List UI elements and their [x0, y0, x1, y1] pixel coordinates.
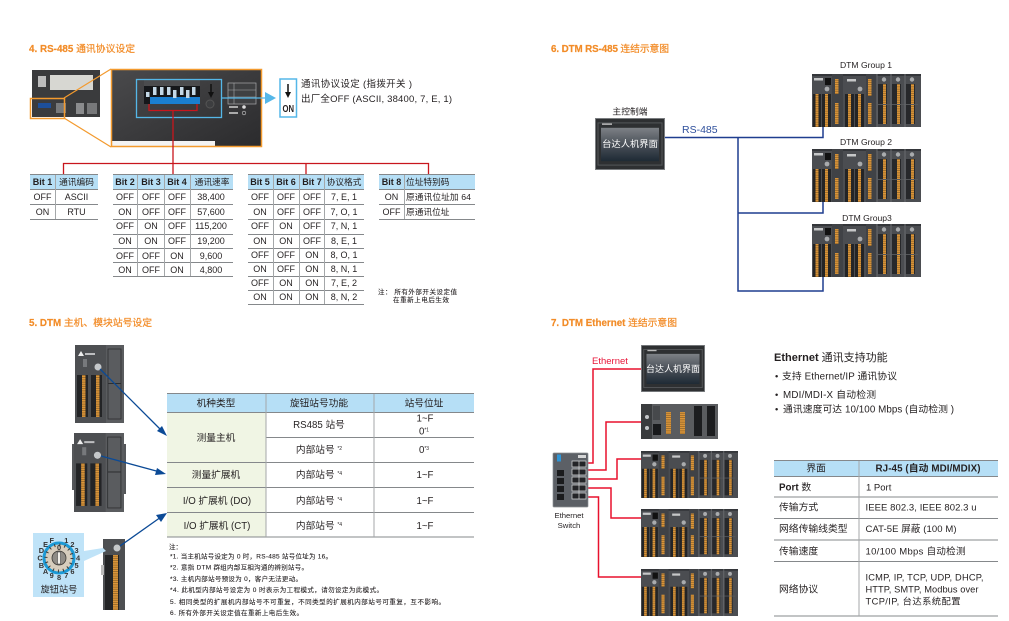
table: Bit 2-4 baud rate: 57,600 [197, 207, 225, 217]
table: Bit 1: RTU [67, 207, 86, 217]
table: Bit 5-7 protocol format: Bit 6 [276, 177, 296, 187]
table: Bit 5-7 protocol format: Bit 5 [250, 177, 270, 187]
notes: station number footnotes: *2. 意指 DTM 群组内部互相沟通的辨别站号。 [170, 562, 308, 572]
table: station number [167, 394, 474, 537]
table: Bit 2-4 baud rate: Bit 3 [141, 177, 161, 187]
table: Bit 5-7 protocol format: OFF [277, 250, 295, 260]
arrows: knobs to table [100, 369, 167, 546]
device: HMI master: 台达人机界面 [602, 138, 658, 149]
group: DTM Group 2 [812, 137, 921, 202]
table: Ethernet specifications: 传输速度 [779, 544, 818, 558]
notes: station number footnotes: 5. 相同类型的扩展机内部站号不可重复，不同类型的扩展机内部站号可重复，互不影响。 [170, 597, 445, 606]
table: Bit 5-7 protocol format: 7, O, 1 [330, 207, 358, 217]
table: station number: 测量扩展机 [192, 468, 241, 481]
table: Bit 5-7 protocol format: 7, E, 1 [331, 192, 357, 202]
table: Bit 2-4 baud rate: OFF [142, 207, 160, 217]
note: external switch settings [378, 287, 458, 304]
device: DTM group row 2 [641, 509, 738, 557]
text: Ethernet support features: 通讯速度可达 10/100 Mbps (自动检测 ) [783, 402, 954, 416]
group: DTM Group 3: DTM Group3 [842, 213, 892, 223]
callout: rotary knob station number [33, 533, 106, 597]
table: Bit 5-7 protocol format: Bit 7 [302, 177, 322, 187]
table: Bit 2-4 baud rate: ON [118, 207, 132, 217]
table: station number: 1~F [417, 521, 434, 532]
callout: rotary knob station number: D [39, 546, 45, 555]
callout: rotary knob station number: 1 [64, 536, 68, 545]
label: RS-485: RS-485 [682, 124, 718, 136]
table: Bit 2-4 baud rate: ON [170, 265, 184, 275]
text: factory default description: 通讯协议设定 (指拨开关 ) [301, 78, 412, 90]
table: station number: *4 [337, 522, 342, 528]
icon: ON switch direction [280, 79, 296, 117]
photo: DIP switch detail [111, 69, 262, 147]
table: station number: RS485 站号 [293, 418, 345, 431]
table: Bit 2-4 baud rate: OFF [168, 207, 186, 217]
table: Bit 5-7 protocol format: 8, E, 1 [331, 236, 357, 246]
text: Ethernet support features: • [775, 390, 778, 400]
table: station number: *1 [424, 428, 429, 434]
panel: section 5 station number settings [29, 316, 474, 617]
table: Bit 2-4 baud rate: OFF [168, 236, 186, 246]
label: Ethernet: Ethernet [592, 356, 628, 367]
table: Ethernet specifications: 界面 [806, 462, 826, 474]
table: Bit 5-7 protocol format [248, 174, 364, 304]
table: Bit 5-7 protocol format: OFF [277, 264, 295, 274]
panel: section 6 RS-485 connection diagram [551, 42, 921, 291]
table: station number: 1~F [417, 470, 434, 481]
table: Bit 1: 通讯编码 [59, 176, 94, 187]
callout: rotary knob station number: E [43, 540, 48, 549]
text: Ethernet support features: 支持 Ethernet/IP 通讯协议 [782, 370, 897, 382]
callout: rotary knob station number: 5 [75, 561, 79, 570]
heading: section 6: 6. DTM RS-485 连结示意图 [551, 42, 669, 55]
table: station number: I/O 扩展机 (CT) [184, 519, 250, 532]
panel: section 7 Ethernet connection diagram [551, 316, 998, 616]
table: Ethernet specifications [774, 460, 998, 616]
table: Bit 5-7 protocol format: ON [279, 278, 293, 288]
device: HMI [641, 345, 705, 392]
table: Bit 8 address code: 原通讯位址 [406, 206, 450, 217]
table: Bit 5-7 protocol format: OFF [303, 192, 321, 202]
table: Ethernet specifications: CAT-5E 屏蔽 (100 M) [866, 523, 956, 535]
group: DTM Group 1 [812, 60, 921, 127]
table: Ethernet specifications: 网络协议 [779, 582, 818, 596]
table: station number: *4 [337, 497, 342, 503]
table: Bit 2-4 baud rate: 9,600 [200, 251, 222, 261]
callout: rotary knob station number: 8 [57, 573, 61, 582]
text: factory default description [301, 78, 452, 105]
table: Bit 5-7 protocol format: ON [305, 264, 319, 274]
photo: DTM device thumbnail [30, 70, 100, 118]
table: Ethernet specifications: 网络传输线类型 [779, 522, 848, 535]
table: Bit 2-4 baud rate: OFF [168, 192, 186, 202]
table: Bit 5-7 protocol format: OFF [303, 207, 321, 217]
arrow: DIP switch to ON indicator [221, 92, 276, 104]
table: Bit 2-4 baud rate: 115,200 [195, 221, 227, 231]
photo: IO module [101, 539, 125, 610]
table: Bit 2-4 baud rate: ON [144, 236, 158, 246]
table: station number: 测量主机 [197, 431, 236, 444]
table: station number: *3 [424, 446, 429, 452]
table: Bit 8 address code [379, 174, 475, 220]
table: Ethernet specifications: Port 数 [779, 480, 811, 494]
table: Bit 2-4 baud rate: ON [118, 236, 132, 246]
table: Bit 2-4 baud rate: ON [118, 265, 132, 275]
table: Bit 5-7 protocol format: OFF [277, 192, 295, 202]
table: Bit 5-7 protocol format: 7, E, 2 [331, 278, 357, 288]
callout: rotary knob station number: 6 [70, 567, 74, 576]
table: Bit 5-7 protocol format: OFF [251, 278, 269, 288]
group: DTM Group 1: DTM Group 1 [840, 60, 892, 70]
label: Ethernet Switch [554, 511, 584, 530]
table: Bit 5-7 protocol format: ON [305, 278, 319, 288]
table: station number: 1~F [417, 414, 434, 424]
table: Bit 5-7 protocol format: ON [253, 207, 267, 217]
table: Bit 5-7 protocol format: OFF [251, 221, 269, 231]
callout: rotary knob station number: 旋钮站号 [41, 584, 77, 594]
table: Bit 2-4 baud rate: OFF [168, 221, 186, 231]
table: Bit 8 address code: ON [385, 192, 398, 202]
table: station number: 内部站号 [296, 496, 335, 507]
table: Bit 5-7 protocol format: ON [253, 264, 267, 274]
table: Bit 1: ASCII [65, 192, 88, 202]
table: Bit 5-7 protocol format: ON [253, 236, 267, 246]
table: Bit 2-4 baud rate: ON [170, 251, 184, 261]
table: Bit 5-7 protocol format: ON [279, 221, 293, 231]
table: Bit 5-7 protocol format: OFF [303, 221, 321, 231]
notes: station number footnotes: *3. 主机内部站号预设为 0，客户无法更动。 [170, 574, 302, 583]
table: Bit 2-4 baud rate: ON [144, 221, 158, 231]
device: Ethernet switch [553, 453, 588, 507]
table: Bit 5-7 protocol format: 7, N, 1 [331, 221, 357, 231]
table: station number: 内部站号 [296, 470, 335, 481]
table: station number: 1~F [417, 496, 434, 507]
table: Bit 5-7 protocol format: ON [253, 292, 267, 302]
table: Bit 8 address code: OFF [382, 207, 401, 217]
device: HMI master [595, 118, 665, 170]
panel: section 4 RS-485 communication settings [29, 42, 475, 304]
notes: station number footnotes: 6. 所有外部开关设定值在重新上电后生效。 [170, 608, 303, 617]
heading: section 5: 5. DTM 主机、模块站号设定 [29, 316, 152, 329]
callout: rotary knob station number: F [49, 536, 54, 545]
connector: red bracket to tables [64, 104, 428, 174]
table: Ethernet specifications: ICMP, IP, TCP, UDP, DHCP, [866, 572, 984, 582]
table: Bit 2-4 baud rate: 4,800 [200, 265, 222, 275]
table: station number: *4 [337, 471, 342, 477]
table: Bit 5-7 protocol format: ON [305, 250, 319, 260]
text: Ethernet support features: • [775, 404, 778, 414]
table: Bit 2-4 baud rate: OFF [116, 221, 134, 231]
table: Ethernet specifications: HTTP, SMTP, Modbus over [866, 584, 978, 594]
heading: section 7: 7. DTM Ethernet 连结示意图 [551, 316, 677, 329]
table: station number: 内部站号 [296, 445, 335, 456]
text: Ethernet support features: MDI/MDI-X 自动检测 [783, 388, 876, 401]
label: Ethernet Switch: Switch [558, 521, 580, 530]
table: Bit 2-4 baud rate: 通讯速率 [195, 176, 230, 187]
table: station number: 0 [419, 445, 424, 456]
table: station number: 机种类型 [197, 396, 236, 410]
notes: station number footnotes [169, 542, 445, 617]
notes: station number footnotes: *4. 此机型内部站号设定为 0 时表示为工程模式，请勿设定为此模式。 [170, 585, 383, 594]
table: station number: I/O 扩展机 (DO) [183, 494, 251, 507]
table: Bit 8 address code: 位址特别码 [406, 176, 450, 187]
table: station number: *2 [337, 446, 342, 452]
callout: rotary knob station number: 3 [75, 546, 79, 555]
table: Bit 2-4 baud rate: OFF [142, 192, 160, 202]
table: Bit 5-7 protocol format: 8, N, 1 [331, 264, 357, 274]
table: Bit 5-7 protocol format: OFF [251, 250, 269, 260]
device: DTM group row 3 [641, 569, 738, 616]
table: station number: 0 [419, 426, 424, 438]
table: Bit 5-7 protocol format: ON [305, 292, 319, 302]
table: Bit 1 [30, 174, 98, 220]
table: Bit 2-4 baud rate: 19,200 [197, 236, 225, 246]
table: station number: 旋钮站号功能 [290, 396, 348, 410]
table: Bit 5-7 protocol format: OFF [277, 207, 295, 217]
table: Bit 2-4 baud rate: Bit 2 [115, 177, 135, 187]
group: DTM Group 3 [812, 213, 921, 277]
photo: main host module [75, 345, 124, 423]
callout: rotary knob station number: A [43, 567, 49, 576]
notes: station number footnotes: 注： [169, 542, 182, 551]
device: HMI: 台达人机界面 [646, 363, 700, 374]
photo: extension module [72, 433, 126, 512]
callout: rotary knob station number: 9 [50, 571, 54, 580]
note: external switch settings: 在重新上电后生效 [393, 295, 450, 304]
device: DTM group row 1 [641, 451, 738, 498]
table: Bit 2-4 baud rate: OFF [116, 192, 134, 202]
callout: rotary knob station number: C [37, 554, 43, 562]
text: factory default description: 出厂全OFF (ASCII, 38400, 7, E, 1) [301, 93, 452, 105]
table: Bit 1: ON [36, 207, 49, 217]
callout: rotary knob station number: 4 [76, 554, 81, 562]
table: Ethernet specifications: 10/100 Mbps 自动检测 [866, 546, 966, 558]
table: Bit 5-7 protocol format: ON [279, 236, 293, 246]
callout: rotary knob station number: 7 [64, 571, 68, 580]
text: Ethernet support features [774, 350, 954, 416]
table: Ethernet specifications: 1 Port [866, 482, 892, 494]
table: Bit 2-4 baud rate: 38,400 [197, 192, 225, 202]
text: Ethernet support features: • [775, 372, 778, 382]
table: Bit 5-7 protocol format: 8, O, 1 [330, 250, 358, 260]
callout: rotary knob station number: 0 [57, 543, 61, 552]
table: Bit 2-4 baud rate: Bit 4 [167, 177, 187, 187]
table: station number: 站号位址 [405, 396, 444, 410]
table: Bit 2-4 baud rate: OFF [116, 251, 134, 261]
text: Ethernet support features: Ethernet 通讯支持功能 [774, 350, 888, 364]
table: Bit 2-4 baud rate: OFF [142, 251, 160, 261]
table: Bit 5-7 protocol format: 协议格式 [327, 176, 362, 187]
table: Bit 8 address code: 原通讯位址加 64 [406, 191, 471, 202]
device: PLC rack [641, 404, 718, 439]
notes: station number footnotes: *1. 当主机站号设定为 0 时，RS-485 站号位址为 16。 [170, 552, 332, 560]
table: Ethernet specifications: 传输方式 [779, 500, 818, 514]
heading: section 4: 4. RS-485 通讯协议设定 [29, 42, 135, 55]
table: Bit 5-7 protocol format: OFF [303, 236, 321, 246]
callout: rotary knob station number: B [39, 561, 44, 570]
label: master controller: 主控制端 [612, 106, 648, 116]
callout lines: zoom from thumbnail to detail [64, 69, 111, 147]
icon: ON switch direction: ON [282, 104, 294, 115]
table: Bit 1: Bit 1 [33, 177, 52, 187]
wiring: RS-485 bus [665, 127, 823, 291]
label: Ethernet Switch: Ethernet [554, 511, 584, 520]
table: Bit 2-4 baud rate: OFF [142, 265, 160, 275]
table: Ethernet specifications: IEEE 802.3, IEEE 802.3 u [866, 502, 976, 514]
table: Bit 1: OFF [34, 192, 52, 202]
callout: rotary knob station number: 2 [70, 540, 74, 549]
table: Bit 5-7 protocol format: 8, N, 2 [331, 292, 357, 302]
table: Ethernet specifications: RJ-45 (自动 MDI/MDIX) [876, 462, 980, 474]
note: external switch settings: 注： 所有外部开关设定值 [378, 287, 458, 296]
wiring: Ethernet cables [588, 369, 641, 577]
table: Bit 5-7 protocol format: OFF [251, 192, 269, 202]
group: DTM Group 2: DTM Group 2 [840, 137, 892, 147]
table: station number: 内部站号 [296, 521, 335, 532]
table: Bit 5-7 protocol format: ON [279, 292, 293, 302]
table: Ethernet specifications: TCP/IP, 台达系统配置 [866, 596, 960, 606]
table: Bit 8 address code: Bit 8 [382, 177, 401, 187]
table: Bit 2-4 baud rate [113, 174, 233, 276]
